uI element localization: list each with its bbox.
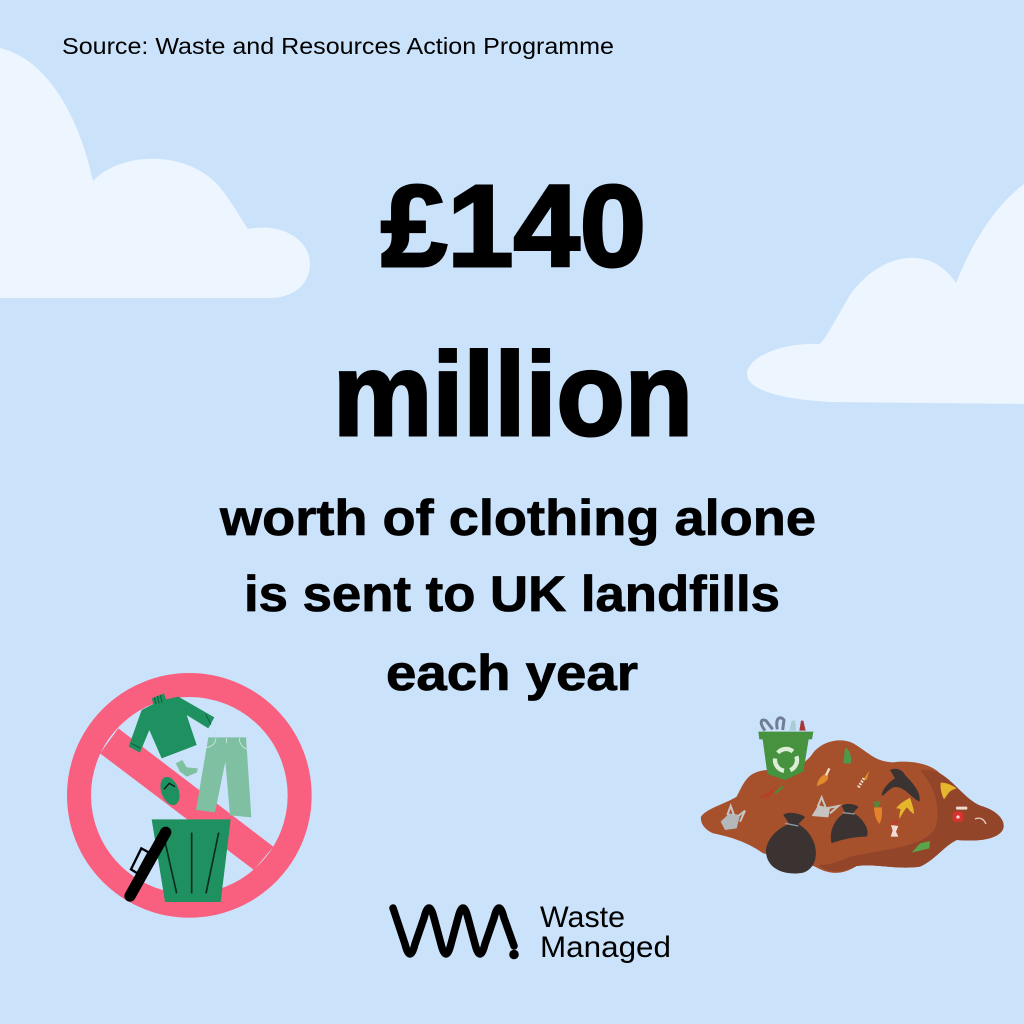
large black sack: [766, 813, 816, 874]
headline: million: million: [333, 329, 693, 461]
recycling bin with rubbish: [758, 718, 813, 780]
logo wordmark: Waste: [540, 901, 625, 934]
icon: no clothes in the bin: [79, 685, 300, 906]
small black sack: [831, 804, 868, 843]
headline: amount: £140: [381, 161, 646, 291]
carrot: [874, 802, 882, 824]
cloud: right: [747, 184, 1024, 404]
statement text: each year: [386, 645, 638, 701]
sock: [176, 760, 198, 777]
banana peel middle: [896, 798, 914, 819]
logo mark: [393, 908, 519, 959]
sweater: [129, 693, 214, 758]
statement text: worth of clothing alone: [219, 490, 816, 546]
green wrapper: [912, 841, 930, 853]
worm: [975, 818, 986, 824]
prohibition sign: [79, 685, 300, 906]
heap shadow: [818, 770, 1004, 871]
bottle: [843, 748, 851, 763]
chicken leg: [817, 768, 829, 786]
trash bin: [152, 819, 231, 902]
fish bone: [858, 771, 869, 787]
carrier bag left: [721, 806, 745, 830]
trousers: [196, 737, 251, 817]
icon: landfill heap: [701, 718, 1004, 874]
apple core: [891, 822, 898, 837]
statement text: is sent to UK landfills: [244, 566, 780, 622]
cloud: top left: [0, 48, 310, 298]
bin lid: [130, 832, 166, 896]
chilli: [758, 786, 783, 798]
carrier bag middle: [812, 797, 838, 817]
torn black sack: [882, 769, 920, 802]
logo: [393, 901, 671, 964]
can: [953, 807, 967, 822]
source note: Source: Waste and Resources Action Programme: [62, 33, 614, 59]
statement text: [219, 490, 816, 701]
logo wordmark: Managed: [540, 931, 671, 964]
banana peel right: [941, 783, 957, 799]
heap: [701, 740, 1004, 873]
logo wordmark: [540, 901, 671, 964]
flip flop: [157, 774, 183, 808]
